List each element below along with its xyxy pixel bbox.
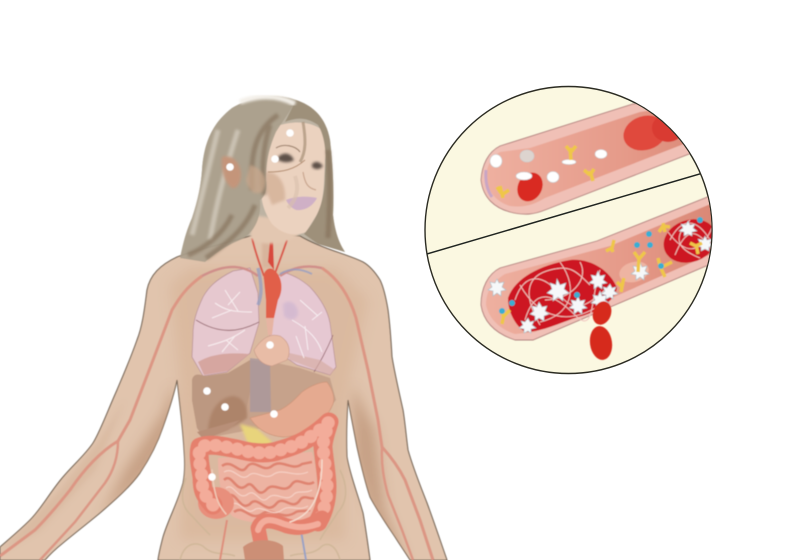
body silhouette xyxy=(0,236,447,560)
iliac vessels xyxy=(220,520,306,560)
face xyxy=(261,123,326,234)
bladder area xyxy=(243,540,284,560)
divider line xyxy=(428,173,700,254)
pelvis bones xyxy=(180,470,346,560)
left lung xyxy=(192,268,259,376)
heart xyxy=(254,335,289,366)
trachea and neck vessels xyxy=(202,237,322,305)
pancreas xyxy=(240,424,272,450)
magnified blood vessel circle xyxy=(420,86,723,374)
vessel lumen xyxy=(486,200,720,334)
figure: woman anatomy xyxy=(0,96,447,560)
stomach xyxy=(250,382,334,437)
healthy vessel xyxy=(480,103,690,216)
antibodies xyxy=(497,146,594,198)
vessel lumen xyxy=(487,110,683,207)
red blood cells xyxy=(623,115,662,151)
liver and abdominal cavity xyxy=(192,360,336,440)
platelets xyxy=(490,150,607,182)
vena cava xyxy=(250,358,271,412)
pale clot remnant xyxy=(619,262,649,282)
large intestine xyxy=(198,422,329,548)
arteries: right arm xyxy=(322,268,433,560)
hair back layer xyxy=(180,96,345,262)
small intestine xyxy=(218,452,317,523)
main clot xyxy=(508,260,617,332)
ear xyxy=(222,156,241,188)
spiky platelets xyxy=(488,221,714,333)
facial features xyxy=(266,122,323,210)
fibrin strands xyxy=(515,220,712,325)
damaged vessel xyxy=(481,192,723,361)
illustration canvas xyxy=(0,86,713,560)
hair overlay xyxy=(180,96,345,262)
aorta and esophagus xyxy=(264,240,281,335)
arteries: left arm xyxy=(0,276,202,560)
right lung xyxy=(270,272,336,375)
circle background xyxy=(425,86,712,374)
body shading xyxy=(0,268,405,560)
white markers xyxy=(203,129,294,481)
vessel wall xyxy=(480,103,690,216)
neck xyxy=(250,215,300,244)
vessel wall xyxy=(481,192,720,340)
blue particles xyxy=(499,217,703,314)
escaping red blood cells xyxy=(592,300,612,326)
antibodies xyxy=(501,223,702,324)
distal clot xyxy=(663,218,712,264)
